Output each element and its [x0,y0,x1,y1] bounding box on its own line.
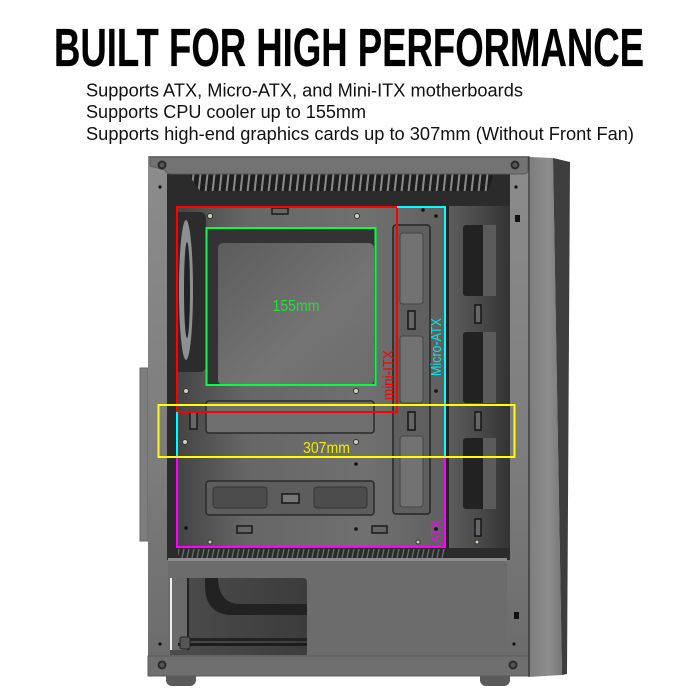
ATX outline [177,457,445,547]
front panel [528,157,570,677]
expansion column [393,225,430,514]
label: mini-ITX: mini-ITX [380,350,397,400]
right compartment [448,206,510,548]
fan [170,212,206,372]
label: Micro-ATX: Micro-ATX [428,318,445,376]
bottom mesh vent [178,549,446,558]
label: ATX: ATX [428,520,445,543]
mini-ITX outline [177,207,397,412]
side panel edge [140,368,148,541]
right compartment slots [463,225,496,536]
top frame bar [150,157,528,174]
PSU shroud [168,558,507,656]
PC case photo [140,156,570,686]
CPU cutout [206,227,376,385]
Micro-ATX outline [177,207,445,457]
case frame [148,156,530,676]
PSU window [170,578,307,655]
feature list: Supports CPU cooler up to 155mm [86,102,366,122]
case screws [158,162,518,668]
case feet [166,670,510,686]
label: 155mm: 155mm [272,298,320,315]
feature list: Supports high-end graphics cards up to 307mm (Without Front Fan) [86,124,634,144]
top mesh vent [188,174,494,191]
standoffs and tabs [182,208,479,544]
CPU cooler outline [206,228,376,385]
lower cutout block [206,481,374,515]
graphics card outline [158,405,514,457]
feature list [86,80,634,144]
feature list: Supports ATX, Micro-ATX, and Mini-ITX motherboards [86,80,523,100]
motherboard tray [177,206,448,548]
bottom frame bar [148,656,529,676]
upper slot [206,401,374,433]
label: 307mm: 307mm [303,440,350,457]
